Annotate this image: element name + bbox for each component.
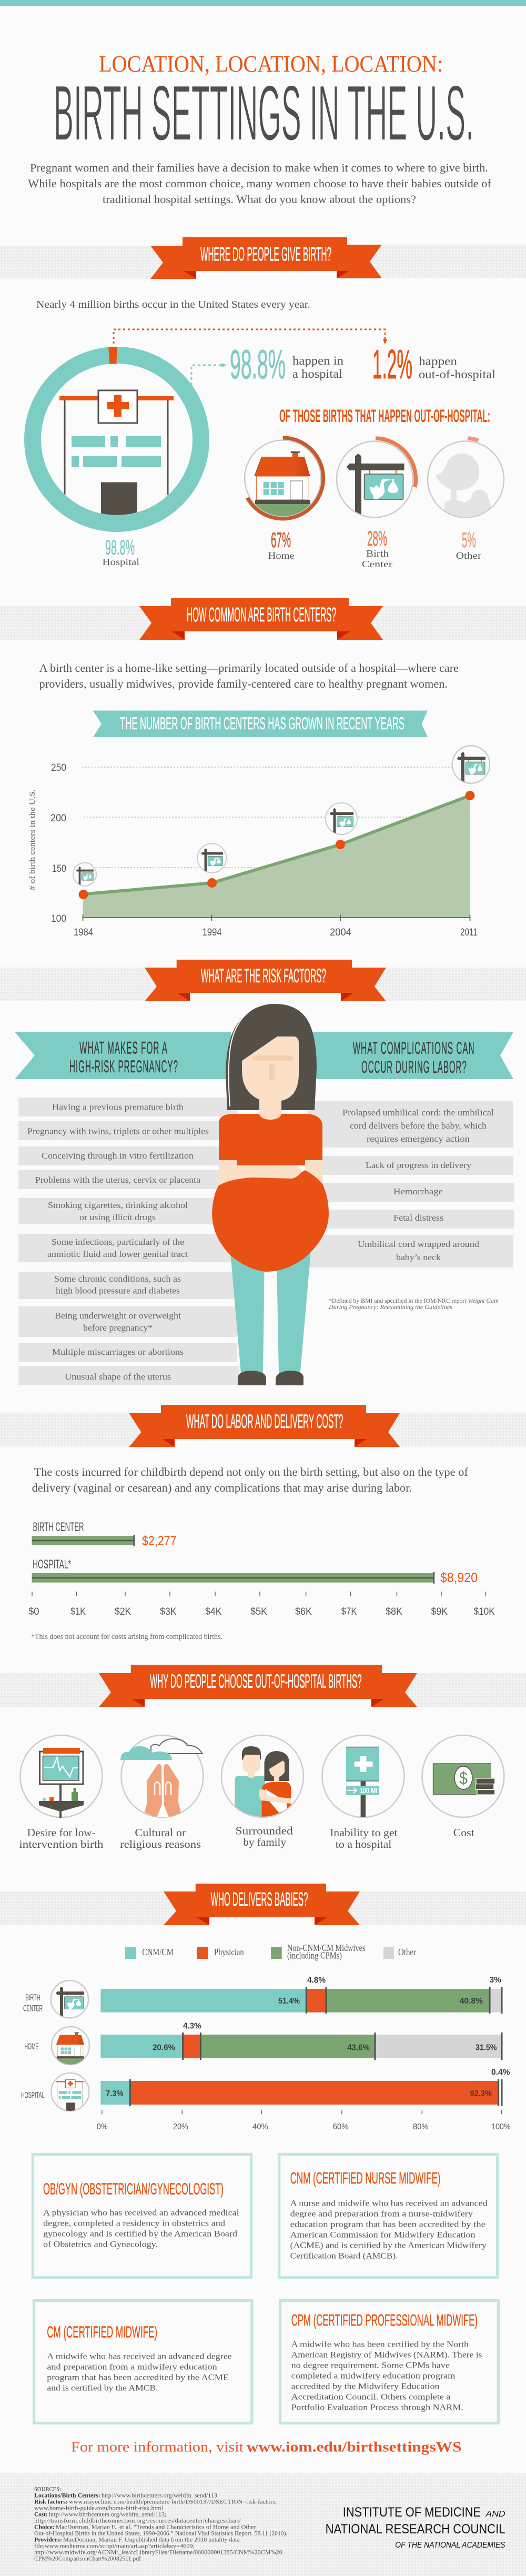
out-of-hospital share stat: 1.2% (372, 341, 412, 387)
card: OB/GYN: A physician who has received an advanced medical (43, 2209, 239, 2218)
reason labels: Inability to get (330, 1826, 398, 1839)
eyebrows (252, 1055, 293, 1061)
dollar axis: $7K (341, 1606, 357, 1617)
reason labels: to a hospital (336, 1838, 391, 1850)
birth center label: Birth (366, 548, 389, 559)
percent axis: 60% (333, 2122, 349, 2131)
sources: www.home-birth-guide.com/home-birth-risk.html (34, 2505, 163, 2512)
percent axis: 0% (97, 2122, 108, 2131)
percent axis (97, 2110, 511, 2131)
complication item text: Fetal distress (393, 1213, 443, 1223)
out-of-hospital share stat: happen (419, 355, 458, 368)
dollar axis: $10K (473, 1606, 495, 1617)
legend: provider types: Non-CNM/CM Midwives (287, 1943, 366, 1953)
card: OB/GYN: gynecology and is certified by the American Board (43, 2230, 237, 2239)
card: CM: and preparation from a midwifery education (47, 2362, 217, 2371)
section ribbon: why out-of-hospital (0, 1665, 526, 1707)
sources: Choice: (34, 2524, 55, 2531)
reason labels: Surrounded (236, 1825, 293, 1837)
icon: hospital monitor (20, 1735, 102, 1818)
stacked bar chart: who delivers babies (21, 1976, 511, 2131)
reason labels: Cost (453, 1826, 474, 1839)
call to action: more information (71, 2439, 462, 2454)
section ribbon: who delivers babies: WHO DELIVERS BABIES? (210, 1888, 308, 1910)
card: CPM: no degree requirement. Some CPMs have (291, 2361, 450, 2370)
belly (212, 1170, 329, 1272)
sources: www.mayoclinic.com/health/premature-birth/DS00137/DSECTION=risk-factors; (69, 2499, 277, 2505)
out-of-hospital share stat: out-of-hospital (419, 368, 495, 381)
reason labels: by family (243, 1836, 286, 1848)
donut caption: Hospital (102, 557, 139, 567)
data points (79, 791, 474, 899)
birth center definition: providers, usually midwives, provide family-centered care to healthy pregnant women. (39, 677, 448, 690)
dollar axis: $5K (250, 1606, 267, 1617)
y axis title: # of birth centers in the U.S. (28, 789, 37, 890)
dollar axis: $8K (386, 1606, 402, 1617)
logo: institute of medicine: OF THE NATIONAL ACADEMIES (395, 2541, 505, 2550)
dollar axis: $9K (431, 1606, 448, 1617)
x axis (74, 914, 478, 938)
reason labels: intervention birth (19, 1838, 104, 1850)
teal banner heading: HIGH-RISK PREGNANCY? (69, 1057, 178, 1076)
footnote: BMI definition (328, 1298, 499, 1311)
birth center definition: A birth center is a home-like setting—primarily located outside of a hospital—where care (39, 661, 459, 675)
percent axis: 80% (413, 2122, 428, 2131)
risk item text: high blood pressure and diabetes (56, 1286, 180, 1296)
card: CNM: A nurse and midwife who has received an advanced (290, 2199, 488, 2208)
dollar axis: $2K (115, 1606, 131, 1617)
card: CM: program that has been accredited by the ACME (47, 2373, 229, 2382)
sources: Locations/Birth Centers: (34, 2493, 100, 2499)
call to action: more information: For more information, visit (71, 2439, 244, 2454)
icon: sign 1994 (197, 843, 226, 873)
intro paragraph: Pregnant women and their families have a decision to make when it comes to where to give birth. (30, 161, 488, 174)
reason labels: Desire for low- (27, 1826, 96, 1839)
x axis: 2011 (460, 927, 478, 938)
complication item bars (308, 1101, 514, 1267)
hair (226, 1004, 317, 1110)
risk item text: Smoking cigarettes, drinking alcohol (48, 1200, 188, 1210)
percent axis: 100% (491, 2122, 511, 2131)
dollar axis: $4K (205, 1606, 222, 1617)
risk item text: Pregnancy with twins, triplets or other multiples (27, 1126, 209, 1136)
y axis labels: 200 (50, 813, 66, 824)
x axis: 2004 (330, 927, 351, 938)
cost footnote: *This does not account for costs arising from complicated births. (31, 1633, 222, 1641)
intro paragraph (28, 161, 492, 206)
card: CNM: Certification Board (AMCB). (290, 2252, 398, 2261)
risk item text: amniotic fluid and lower genital tract (47, 1249, 188, 1259)
risk item text: Problems with the uterus, cervix or placenta (35, 1175, 200, 1185)
complication item text: requires emergency action (367, 1134, 470, 1144)
intro paragraph: traditional hospital settings. What do you know about the options? (103, 193, 416, 206)
trend line (83, 796, 470, 894)
card: CPM: completed a midwifery education program (291, 2372, 456, 2381)
row: hospital: 92.3% (470, 2089, 492, 2098)
sources: Cost: (34, 2512, 48, 2518)
complication item text: cord delivers before the baby, which (350, 1121, 487, 1131)
donut caption (102, 536, 139, 567)
arms (219, 1160, 301, 1185)
legend: provider types: Physician (214, 1947, 244, 1957)
top accent bar (0, 0, 526, 6)
icon: sign 2011 (452, 746, 490, 783)
complication item text: Lack of progress in delivery (366, 1160, 472, 1170)
sources: http://www.birthcenters.org/webfm_send/113; (49, 2512, 166, 2518)
cost paragraph: delivery (vaginal or cesarean) and any complications that may arise during labor. (32, 1481, 412, 1494)
births per year statement: Nearly 4 million births occur in the United States every year. (36, 299, 310, 310)
footnote: BMI definition: *Defined by BMI and specified in the IOM/NRC report Weight Gain (329, 1298, 499, 1304)
y axis labels: 250 (51, 762, 66, 773)
row: hospital: HOSPITAL (21, 2090, 45, 2100)
face and neck (242, 1037, 299, 1120)
icon: other share (428, 438, 504, 518)
nose (269, 1063, 275, 1081)
dollar axis: $1K (70, 1606, 86, 1617)
section ribbon: how common are birth centers (0, 598, 526, 640)
row: home: 43.6% (347, 2044, 370, 2052)
card: CPM: Portfolio Evaluation Process through NARM. (291, 2403, 463, 2412)
row: birth center: CENTER (23, 2004, 43, 2014)
risk item text: before pregnancy* (83, 1323, 153, 1333)
kicker heading: LOCATION, LOCATION, LOCATION: (99, 51, 443, 77)
footer band (0, 2473, 526, 2576)
home label (268, 529, 295, 561)
other label: Other (456, 550, 481, 561)
card: OB/GYN (33, 2154, 251, 2277)
card: CPM: Accreditation Council. Others complete a (291, 2393, 450, 2402)
y axis labels (50, 762, 66, 924)
card: OB/GYN: degree, completed a residency in obstetrics and (43, 2219, 225, 2228)
row: home: 20.6% (153, 2044, 175, 2052)
teal banner heading (310, 1032, 513, 1079)
dollar axis (28, 1592, 495, 1617)
hospital donut with building (33, 347, 201, 524)
card: CM: A midwife who has received an advanced degree (47, 2352, 232, 2361)
legend: provider types: Other (398, 1947, 416, 1957)
row: home: HOME (25, 2041, 38, 2051)
sources: http://transform.childbirthconnection.org/resources/datacenter/chargeschart/ (34, 2518, 241, 2524)
hospital share stat: a hospital (292, 367, 342, 380)
logo: institute of medicine: NATIONAL RESEARCH COUNCIL (326, 2522, 505, 2537)
home label: Home (268, 550, 295, 561)
sources: Risk factors: (34, 2499, 68, 2505)
x axis: 1984 (74, 927, 93, 938)
cost paragraph: The costs incurred for childbirth depend not only on the birth setting, but also on the type of (34, 1465, 469, 1478)
legend: provider types (125, 1943, 416, 1961)
row: hospital (21, 2068, 510, 2112)
icon: money: $ (459, 1768, 468, 1788)
risk item text: Multiple miscarriages or abortions (52, 1347, 184, 1357)
birth center label (362, 527, 392, 569)
birth center definition (39, 661, 459, 690)
dress top (219, 1114, 322, 1165)
risk item text (27, 1102, 209, 1382)
icon: home share (245, 438, 323, 519)
row: birth center: 40.8% (460, 1997, 483, 2006)
card: CPM: A midwife who has been certified by the North (291, 2340, 469, 2349)
legs (230, 1252, 265, 1373)
icon: birth center share (337, 438, 416, 518)
risk item text: Being underweight or overweight (55, 1311, 181, 1321)
row: home (25, 2022, 502, 2065)
sources: Out-of-Hospital Births in the United States, 1990-2006.” National Vital Statistics Report. 58.11 (2010). (34, 2531, 288, 2537)
percent axis: 20% (173, 2122, 188, 2131)
card: CNM: (ACME) and is certified by the American Midwifery (290, 2241, 487, 2250)
risk item text: or using illicit drugs (79, 1212, 156, 1222)
icon: sign 1984 (73, 863, 96, 886)
card: OB/GYN: of Obstetrics and Gynecology. (43, 2240, 158, 2249)
icon: road sign to hospital (322, 1735, 404, 1817)
dollar axis: $3K (160, 1606, 177, 1617)
sources: MacDorman, Marian F., et al. “Trends and Characteristics of Home and Other (56, 2524, 256, 2531)
teal ribbon: chart title (93, 710, 428, 737)
sources: http://www.midwife.org/ACNM/_les/ccLibraryFiles/Filename/000000001385/CNM%20CM%20 (34, 2550, 282, 2556)
card: CNM (279, 2154, 498, 2277)
complication item text: Umbilical cord wrapped around (358, 1239, 480, 1249)
panel: high-risk pregnancy list (15, 1032, 239, 1385)
footnote: BMI definition: During Pregnancy: Reexamining the Guidelines (328, 1304, 453, 1311)
bar chart: cost (28, 1520, 495, 1641)
row: birth center: 51.4% (278, 1997, 300, 2006)
row: birth center: BIRTH (25, 1993, 40, 2003)
icon: sign 2004 (326, 803, 357, 834)
cost paragraph (32, 1465, 469, 1494)
risk item text: Unusual shape of the uterus (65, 1372, 171, 1382)
section ribbon: where do people give birth: WHERE DO PEOPLE GIVE BIRTH? (200, 243, 331, 265)
complication item text: Hemorrhage (393, 1186, 443, 1196)
card: CM: and is certified by the AMCB. (47, 2383, 158, 2392)
section ribbon: risk factors (0, 960, 526, 1001)
call to action: more information: www.iom.edu/birthsettingsWS (247, 2439, 462, 2454)
icon: money (422, 1735, 504, 1817)
risk item text: Some infections, particularly of the (52, 1237, 184, 1247)
reason labels: religious reasons (120, 1838, 201, 1850)
hospital bar: $8,920 (440, 1571, 478, 1585)
complication item text: baby’s neck (396, 1252, 441, 1262)
dollar axis: $0 (28, 1606, 39, 1617)
dotted connector to out-of-hospital (114, 329, 387, 345)
icon: praying hands and clouds (120, 1735, 203, 1817)
row: birth center (23, 1976, 502, 2018)
hospital bar: HOSPITAL* (33, 1557, 71, 1572)
sources: SOURCES: (34, 2486, 61, 2492)
panel: where births happen (33, 299, 504, 569)
legend: provider types: (including CPMs) (287, 1950, 342, 1961)
logo: institute of medicine: INSTITUTE OF MEDICINE (343, 2505, 481, 2520)
section ribbon: who delivers babies (0, 1884, 526, 1925)
card: OB/GYN: OB/GYN (OBSTETRICIAN/GYNECOLOGIST) (43, 2180, 224, 2198)
birth center bar: BIRTH CENTER (33, 1520, 84, 1534)
panel: reasons for out-of-hospital birth (19, 1735, 504, 1850)
row: birth center: 4.8% (307, 1976, 326, 1985)
row: home: 4.3% (183, 2022, 201, 2031)
logo: institute of medicine (326, 2505, 505, 2550)
sources: Providers: (34, 2537, 62, 2543)
title block (54, 51, 474, 157)
card: CNM: degree and preparation from a nurse-midwifery (290, 2210, 473, 2219)
complication item text: Prolapsed umbilical cord: the umbilical (342, 1108, 494, 1118)
icon: family with baby (221, 1735, 304, 1820)
other label: 5% (462, 529, 476, 552)
dollar axis: $6K (295, 1606, 312, 1617)
card: CPM: accredited by the Midwifery Education (291, 2382, 440, 2391)
section ribbon: labor and delivery cost (0, 1405, 526, 1447)
x axis: 1994 (202, 927, 222, 938)
section ribbon: where do people give birth (0, 237, 526, 279)
panel: labor complications list (308, 1032, 514, 1311)
teal banner heading: WHAT MAKES FOR A (79, 1039, 168, 1058)
risk item text: Having a previous premature birth (52, 1102, 184, 1112)
percent axis: 40% (252, 2122, 268, 2131)
intro paragraph: While hospitals are the most common choice, many women choose to have their babies outside of (28, 177, 492, 190)
area fill (83, 796, 470, 918)
card: CPM: American Registry of Midwives (NARM). There is (291, 2351, 482, 2360)
complication item text (342, 1108, 494, 1262)
other label (456, 529, 481, 561)
home label: 67% (271, 529, 291, 552)
risk item bars (18, 1098, 239, 1385)
card: CNM: education program that has been accredited by the (290, 2220, 485, 2229)
birth center label: Center (362, 559, 392, 569)
birth center label: 28% (367, 527, 387, 550)
row: hospital: 7.3% (106, 2089, 124, 2098)
birth center bar (32, 1520, 176, 1548)
reason labels (19, 1825, 474, 1850)
reason labels: Cultural or (135, 1826, 186, 1839)
y axis labels: 100 (51, 913, 66, 924)
card: CNM: American Commission for Midwifery Education (290, 2231, 476, 2240)
sources: MacDorman, Marian F. Unpublished data from the 2010 natality data (63, 2537, 240, 2543)
risk item text: Conceiving through in vitro fertilization (42, 1151, 194, 1161)
hospital share stat: happen in (292, 354, 344, 367)
hair highlight (229, 1007, 256, 1106)
shoes (238, 1371, 304, 1385)
area chart: birth centers 1984–2011 (28, 746, 490, 938)
teal banner heading (15, 1032, 231, 1079)
sources: CPM%20ComparisonChart%20082511.pdf (34, 2556, 141, 2562)
sources (34, 2486, 288, 2562)
icon: road sign to hospital: 100 MI (360, 1786, 378, 1795)
sources: http://www.birthcenters.org/webfm_send/113 (102, 2493, 217, 2499)
row: home: 31.5% (476, 2044, 497, 2052)
card: CPM (280, 2301, 498, 2423)
row: hospital: 0.4% (491, 2068, 510, 2077)
sources: file;www.medterms.com/script/main/art.asp?articlekey=4609; (34, 2543, 195, 2550)
risk item text: Some chronic conditions, such as (54, 1274, 181, 1284)
hospital bar (32, 1557, 478, 1585)
card: CM: CM (CERTIFIED MIDWIFE) (47, 2323, 157, 2341)
illustration: pregnant woman (212, 1004, 329, 1385)
row: birth center: 3% (489, 1976, 501, 1985)
hospital share stat: 98.8% (230, 341, 286, 387)
logo: institute of medicine: AND (485, 2510, 505, 2519)
legend: provider types: CNM/CM (142, 1947, 174, 1957)
section ribbon: risk factors: WHAT ARE THE RISK FACTORS? (201, 965, 326, 987)
dotted connector to hospital share (191, 363, 227, 385)
y axis labels: 150 (52, 863, 66, 874)
birth center bar: $2,277 (142, 1534, 177, 1548)
donut caption: 98.8% (105, 536, 135, 559)
card: CM (34, 2301, 252, 2423)
